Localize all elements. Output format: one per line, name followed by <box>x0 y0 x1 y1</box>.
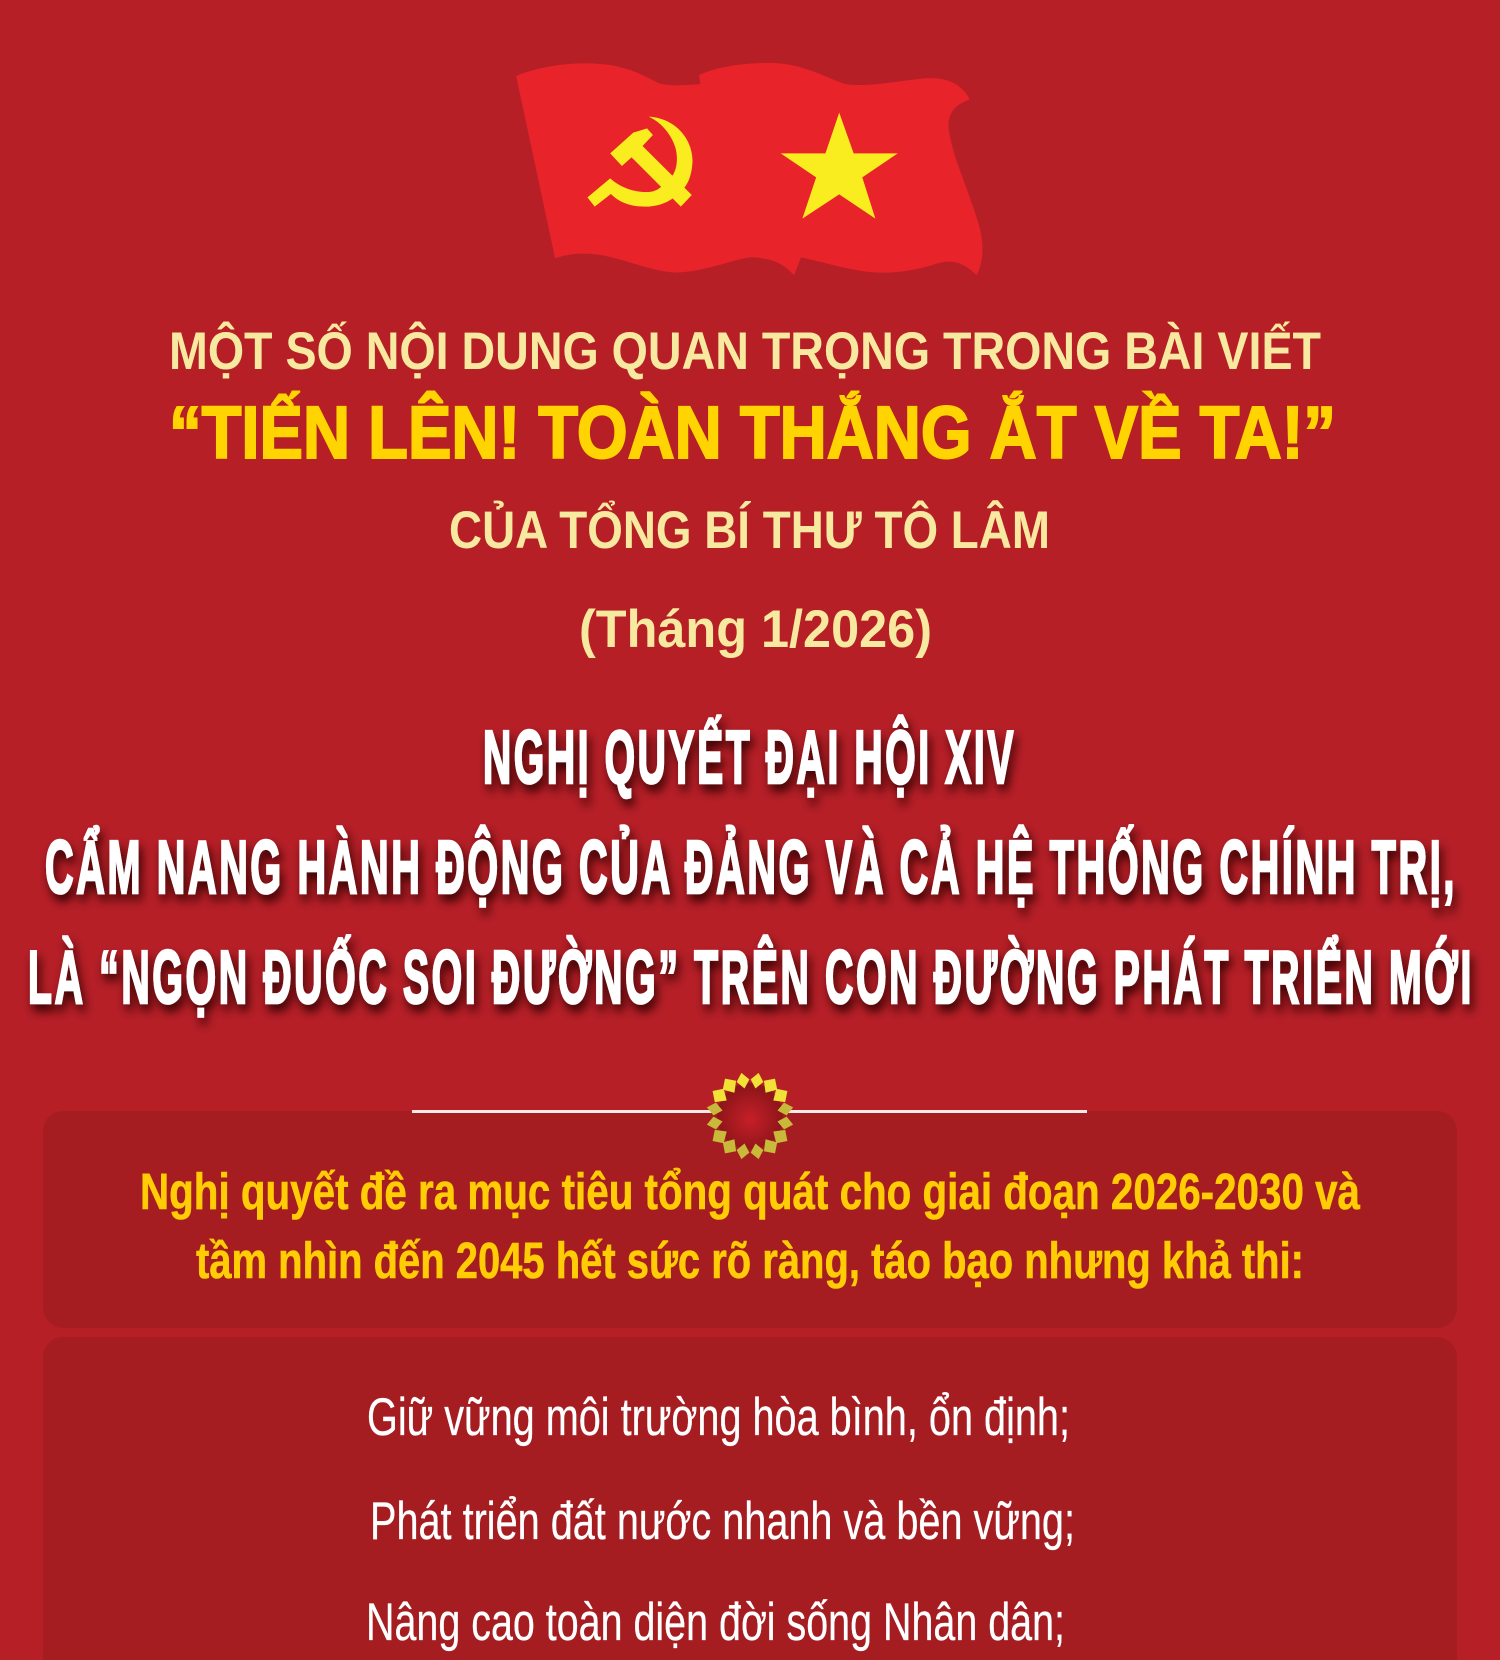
heading line 3: CỦA TỔNG BÍ THƯ TÔ LÂM <box>449 499 1050 560</box>
main title: NGHỊ QUYẾT ĐẠI HỘI XIV <box>483 715 1016 799</box>
main title <box>28 715 1474 1019</box>
icon: party flag <box>516 63 982 275</box>
panel: goals list <box>43 1337 1457 1660</box>
heading line 1: MỘT SỐ NỘI DUNG QUAN TRỌNG TRONG BÀI VIẾT <box>169 320 1321 381</box>
date: (Tháng 1/2026) <box>579 600 932 659</box>
goal 2: Phát triển đất nước nhanh và bền vững; <box>370 1492 1075 1551</box>
goal 3: Nâng cao toàn diện đời sống Nhân dân; <box>366 1593 1065 1652</box>
panel: goal statement <box>43 1111 1457 1328</box>
divider with medallion <box>412 1072 1087 1160</box>
heading line 2: “TIẾN LÊN! TOÀN THẮNG ẮT VỀ TA!” <box>169 391 1336 474</box>
goal 1: Giữ vững môi trường hòa bình, ổn định; <box>367 1388 1070 1447</box>
